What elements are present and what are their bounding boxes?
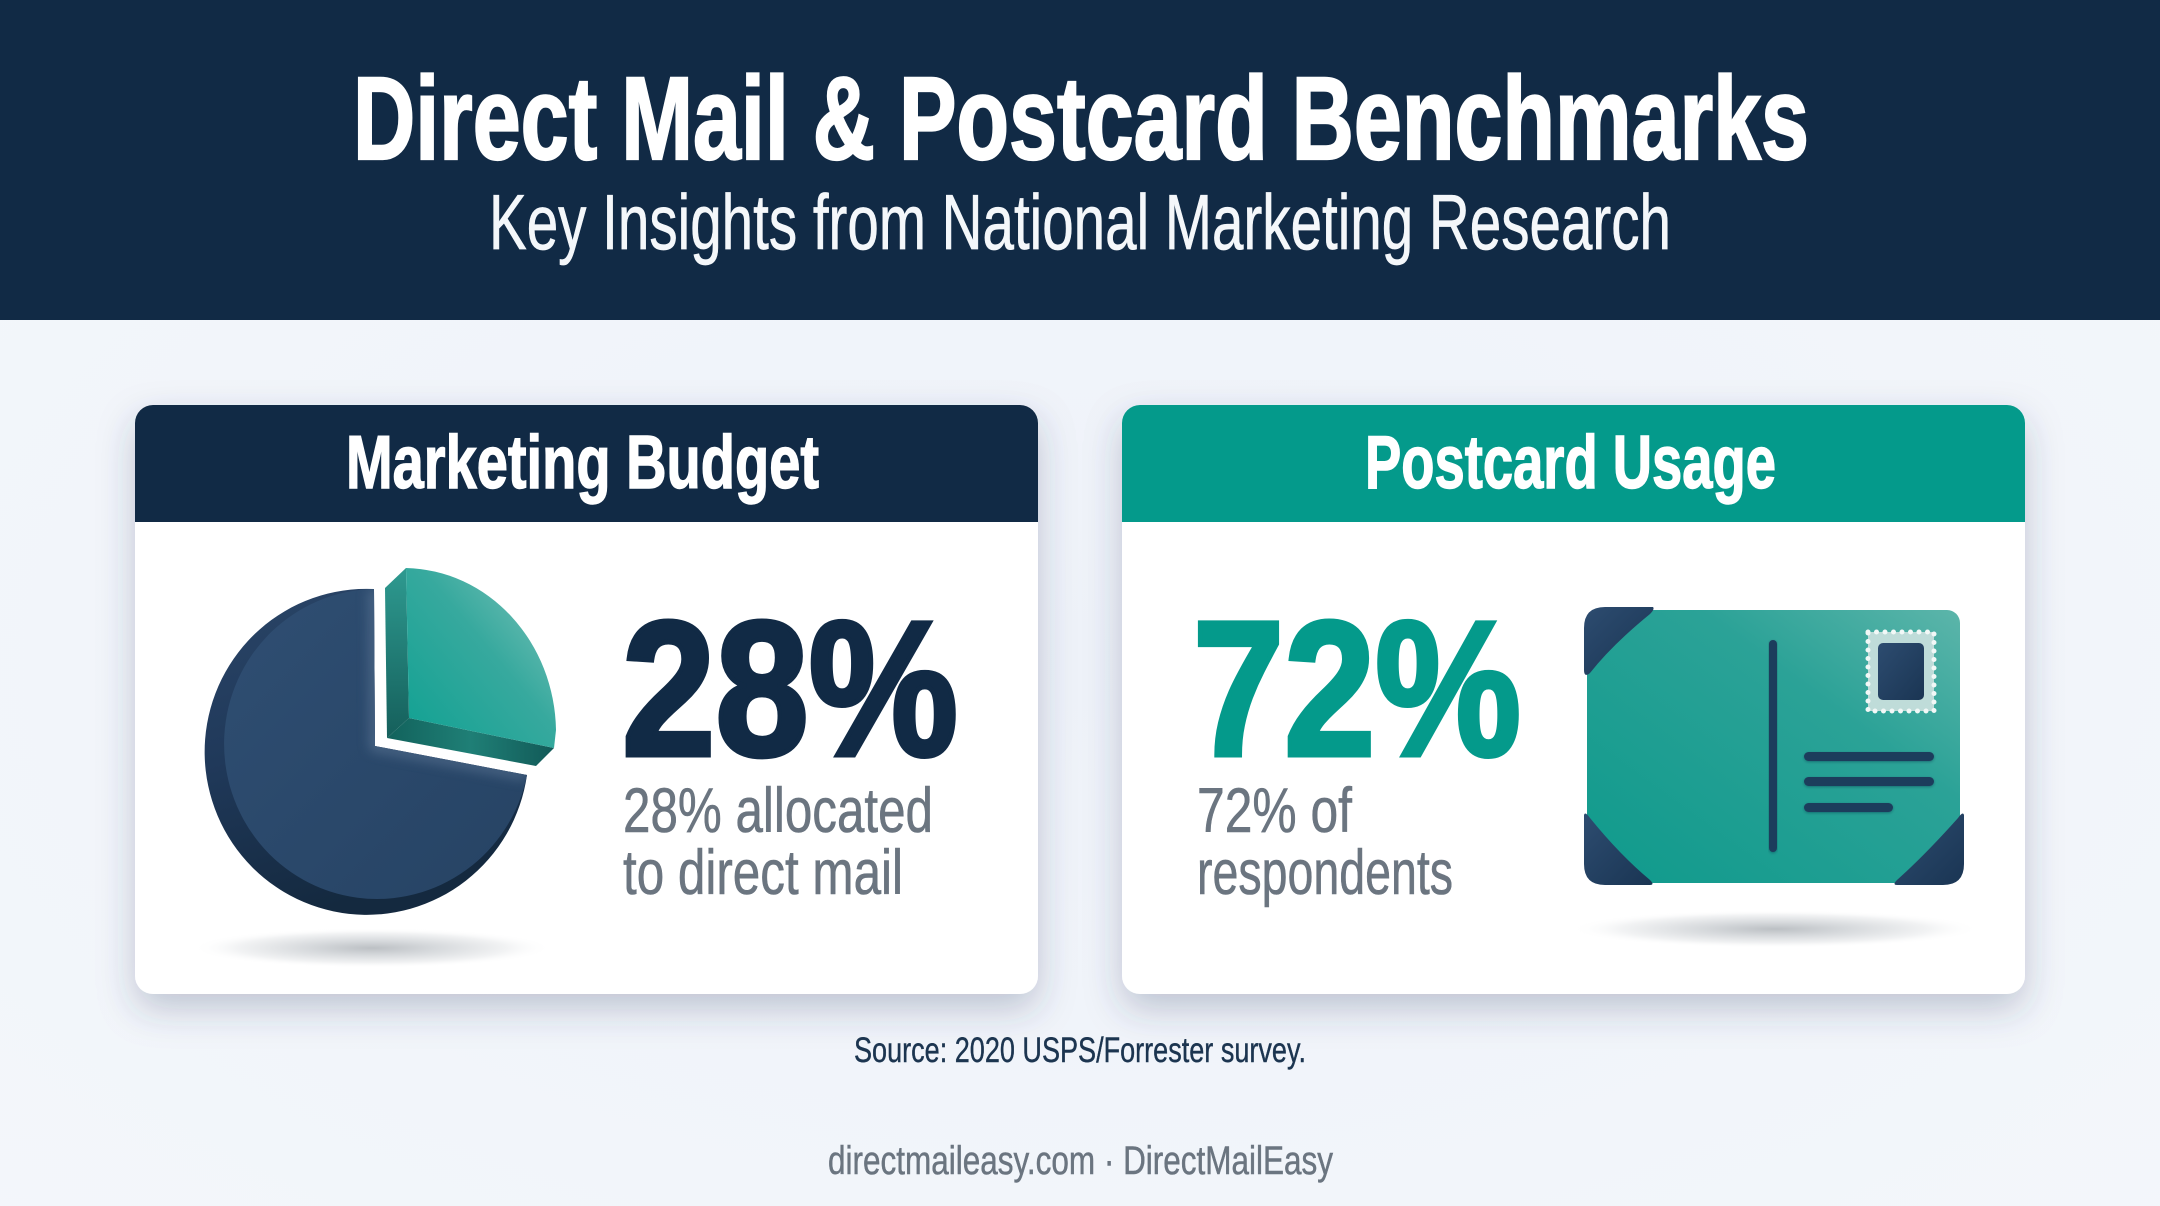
postcard shadow — [1570, 910, 1980, 948]
description: budget: 28% allocated — [623, 776, 933, 846]
panel header: postcard usage: Postcard Usage — [1365, 420, 1776, 504]
header band — [0, 0, 2160, 320]
pie shadow — [192, 928, 552, 968]
panel: marketing budget — [135, 405, 1038, 994]
description: postcard: 72% of — [1197, 776, 1352, 846]
description: postcard — [1197, 776, 1453, 908]
postcard divider — [1769, 640, 1777, 852]
description: budget — [623, 776, 933, 908]
big number 28%: 28% — [622, 581, 958, 796]
description: budget: to direct mail — [623, 838, 903, 908]
icon: postcard — [1584, 607, 1964, 885]
description: postcard: respondents — [1197, 838, 1453, 908]
postcard corners — [1584, 607, 1964, 885]
icon: 3D pie chart — [205, 568, 556, 915]
postage stamp — [1868, 632, 1934, 711]
footer credit: directmaileasy.com · DirectMailEasy — [828, 1139, 1333, 1183]
postcard address lines — [1804, 752, 1934, 812]
panel: postcard usage — [1122, 405, 2025, 994]
panel header: marketing budget: Marketing Budget — [346, 420, 819, 504]
source note: Source: 2020 USPS/Forrester survey. — [854, 1031, 1306, 1070]
subtitle: Key Insights from National Marketing Research — [489, 178, 1671, 266]
panel header: postcard usage — [1122, 405, 2025, 522]
panel header: marketing budget — [135, 405, 1038, 522]
big number 72%: 72% — [1193, 581, 1521, 796]
